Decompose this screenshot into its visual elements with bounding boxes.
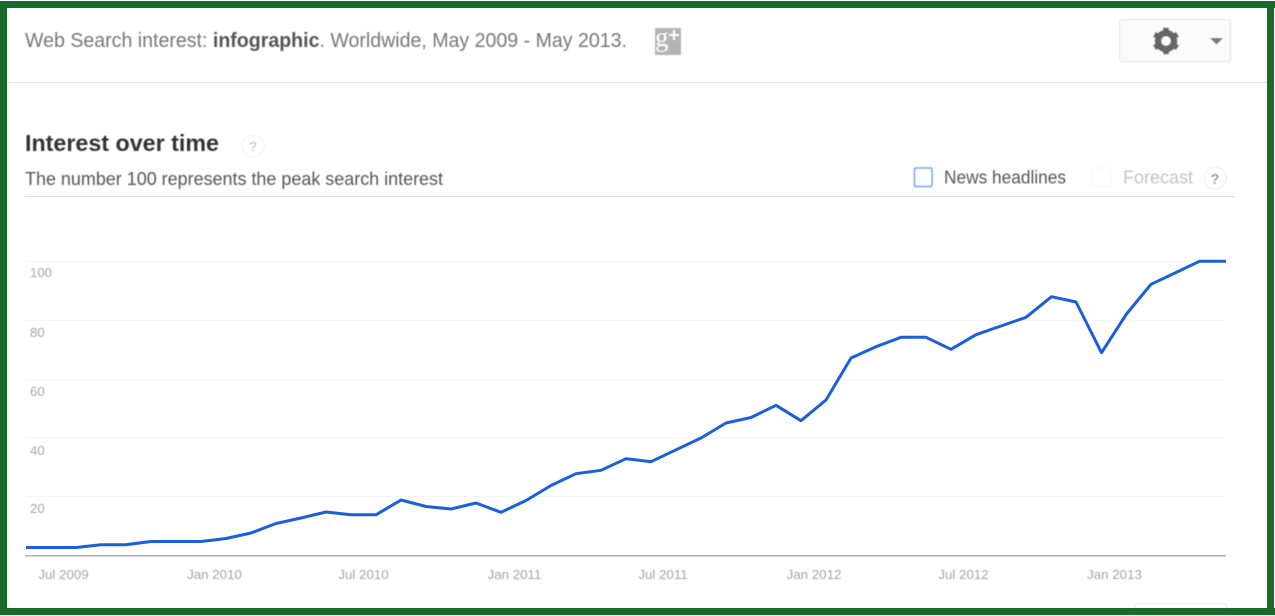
header divider (8, 82, 1267, 83)
header section (25, 20, 1230, 62)
header title: Web Search interest: infographic. Worldwide, May 2009 - May 2013. (25, 29, 627, 52)
forecast checkbox (1092, 167, 1226, 189)
partial button at bottom (1134, 604, 1226, 616)
forecast checkbox: Forecast (1123, 168, 1193, 188)
interest section heading (25, 130, 1226, 189)
x axis labels: Jul 2009 (38, 567, 89, 582)
y axis labels: 40 (30, 443, 45, 458)
search interest line (26, 261, 1226, 548)
y axis labels (30, 265, 52, 516)
x axis labels: Jan 2011 (488, 567, 541, 582)
icon: dropdown arrow (1210, 38, 1223, 44)
heading: Interest over time (25, 130, 219, 156)
icon: google plus: g (655, 22, 668, 52)
y axis labels: 80 (30, 325, 45, 340)
subheading: The number 100 represents the peak search interest (25, 169, 443, 189)
x axis labels (38, 567, 1142, 582)
icon: help: ? (249, 139, 257, 154)
y axis labels: 60 (30, 384, 45, 399)
icon: google plus (654, 28, 682, 56)
y axis labels: 20 (30, 501, 45, 516)
line chart (25, 261, 1226, 582)
y axis labels: 100 (30, 265, 52, 280)
forecast checkbox: ? (1210, 171, 1220, 188)
x axis labels: Jan 2012 (787, 567, 841, 582)
x axis labels: Jul 2010 (338, 567, 389, 582)
x axis labels: Jan 2010 (187, 567, 242, 582)
news headlines checkbox: News headlines (944, 168, 1066, 188)
icon: help (242, 135, 264, 157)
settings button (1120, 20, 1230, 62)
x axis baseline (25, 555, 1226, 556)
x axis labels: Jul 2011 (638, 567, 688, 582)
x axis labels: Jul 2012 (938, 567, 989, 582)
icon: gear (1153, 28, 1179, 54)
x axis labels: Jan 2013 (1087, 567, 1142, 582)
